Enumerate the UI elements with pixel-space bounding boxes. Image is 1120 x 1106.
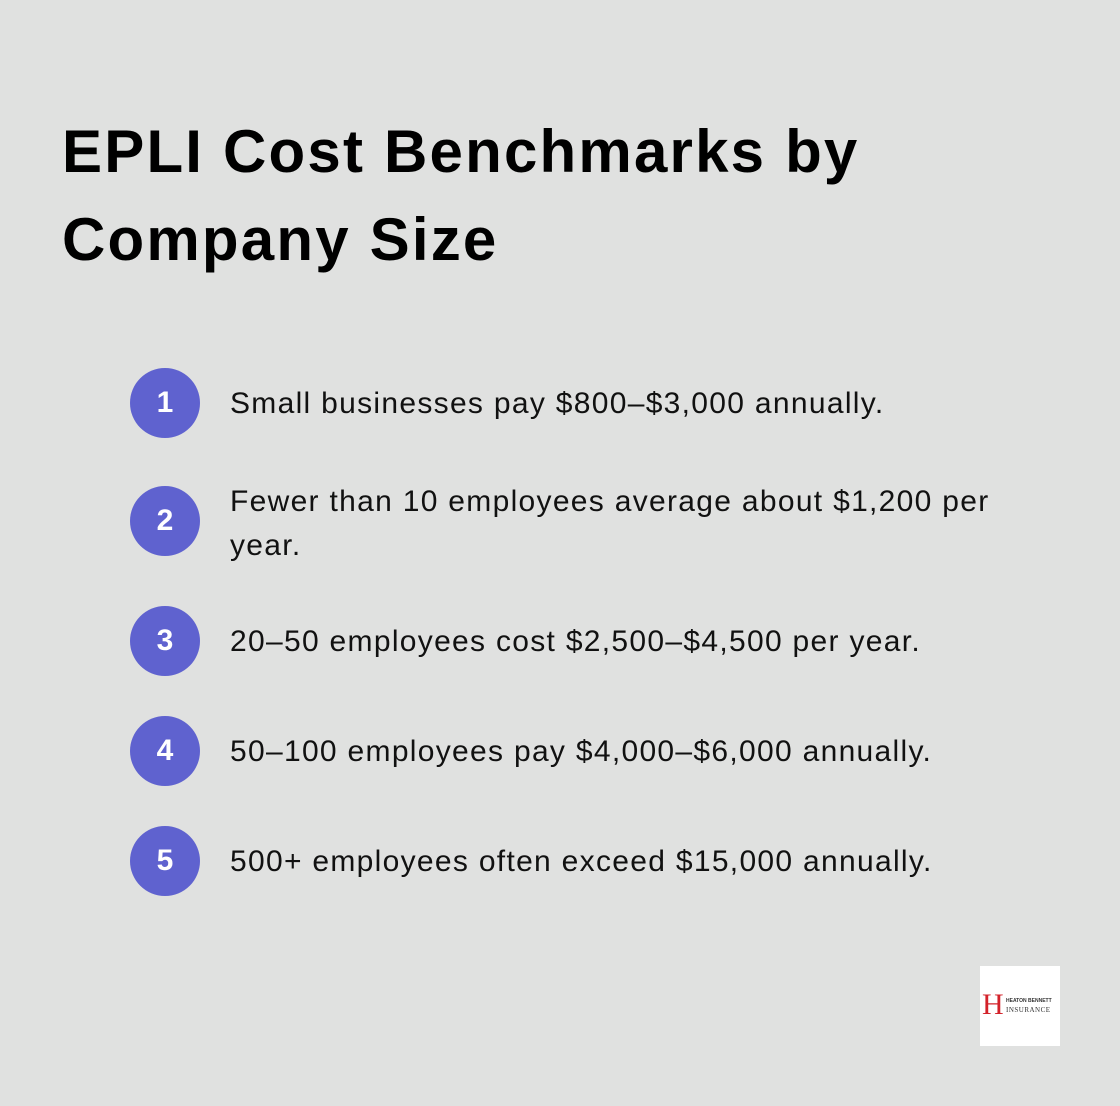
item 1: 1 [157, 386, 173, 419]
item 5: 5 [157, 844, 173, 877]
logo: H [982, 988, 1004, 1021]
item 1 [130, 368, 884, 438]
item 4: 50–100 employees pay $4,000–$6,000 annually. [230, 735, 932, 768]
item 3: 20–50 employees cost $2,500–$4,500 per year. [230, 625, 921, 658]
title: Company Size [62, 206, 498, 273]
item 2: Fewer than 10 employees average about $1,200 per year. [230, 485, 990, 562]
item 5 [130, 826, 933, 896]
item 3: 3 [157, 624, 173, 657]
item 2: 2 [157, 504, 173, 537]
item 5: 500+ employees often exceed $15,000 annually. [230, 845, 933, 878]
item 1: Small businesses pay $800–$3,000 annually. [230, 387, 884, 420]
logo: HEATON BENNETT [1006, 998, 1052, 1004]
item 4 [130, 716, 932, 786]
logo [980, 966, 1060, 1046]
title [62, 118, 860, 273]
logo: INSURANCE [1006, 1006, 1051, 1014]
item 3 [130, 606, 921, 676]
title: EPLI Cost Benchmarks by [62, 118, 860, 185]
item 4: 4 [157, 734, 173, 767]
